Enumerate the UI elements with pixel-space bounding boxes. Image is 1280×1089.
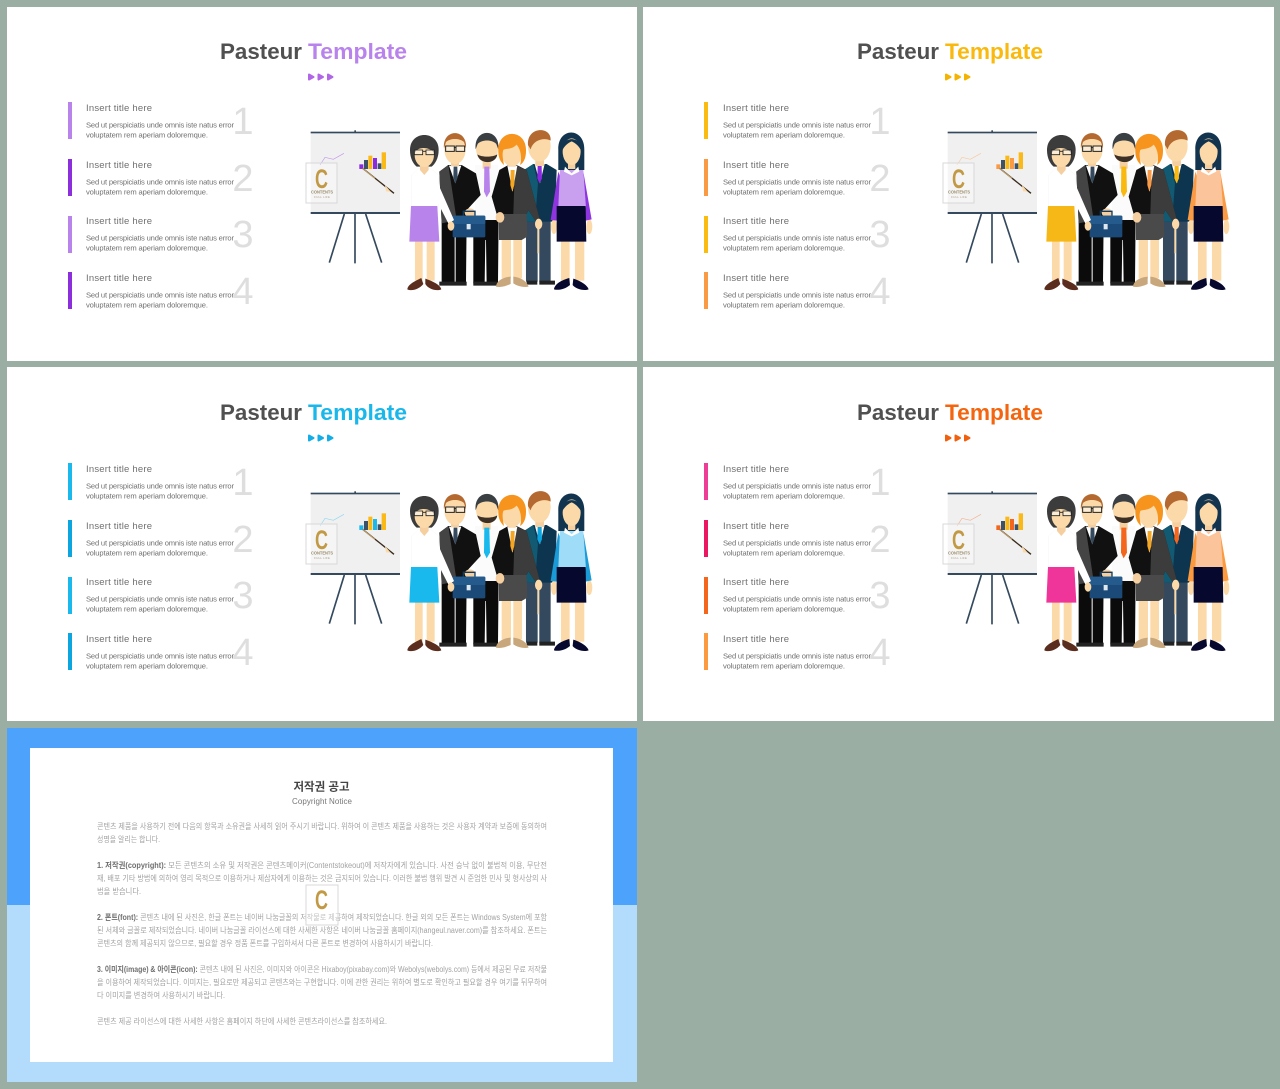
illustration: team beside presentation board: [311, 491, 592, 651]
section 3: image and icon: [97, 964, 547, 1000]
icon: three arrows: [946, 436, 970, 440]
list item 1: Sed ut perspiciatis unde omnis iste natus error: [723, 482, 871, 490]
list item 4: 4: [869, 632, 891, 674]
watermark logo: FULL LIFE: [314, 556, 330, 560]
list item 4: voluptatem rem aperiam doloremque.: [723, 300, 845, 310]
intro paragraph: 성명을 알리는 합니다.: [97, 834, 160, 844]
list item 3: voluptatem rem aperiam doloremque.: [723, 244, 845, 252]
watermark logo: [943, 524, 974, 564]
notice subtitle: Copyright Notice: [292, 797, 353, 806]
list item 2: 2: [869, 519, 891, 561]
list item 4: Insert title here: [723, 273, 789, 284]
list item 1: 1: [869, 101, 891, 143]
heading: Template: [308, 400, 407, 425]
list item 2: [68, 519, 254, 561]
list item 4: Insert title here: [86, 273, 152, 284]
list item 3: voluptatem rem aperiam doloremque.: [723, 604, 845, 614]
heading: Pasteur: [857, 39, 939, 64]
list item 2: 2: [232, 519, 254, 561]
watermark logo: CONTENTS: [948, 190, 970, 194]
watermark logo: [306, 524, 337, 564]
list item 1: 1: [232, 101, 254, 143]
panel: purple slide: [7, 7, 637, 361]
intro paragraph: [97, 821, 547, 844]
list item 1: Insert title here: [86, 464, 152, 475]
list item 3: Insert title here: [723, 577, 789, 588]
list item 2: Insert title here: [86, 160, 152, 171]
list item 1: Sed ut perspiciatis unde omnis iste natus error: [86, 120, 234, 130]
heading: [220, 39, 407, 64]
list item 4: Sed ut perspiciatis unde omnis iste natus error: [723, 652, 871, 660]
list item 1: voluptatem rem aperiam doloremque.: [723, 130, 845, 140]
list item 3: [68, 214, 254, 256]
panel: copyright notice: [7, 728, 637, 1082]
list item 3: Insert title here: [86, 577, 152, 588]
illustration: team beside presentation board: [948, 130, 1229, 290]
list item 3: 3: [869, 214, 891, 256]
list item 1: Sed ut perspiciatis unde omnis iste natus error: [86, 482, 234, 490]
list item 4: Insert title here: [723, 634, 789, 645]
list item 4: 4: [232, 271, 254, 313]
blue upper band: [7, 728, 637, 906]
list item 2: voluptatem rem aperiam doloremque.: [86, 188, 208, 196]
section 3: image and icon: 을 이용하여 제작되었습니다. 이미지는, 필요로만 제공되고 콘텐츠와는 구현합니다. 이에 관한 권리는 위하여 별도로 확인하고 필요할 경우 여기를 뒤무하여: [97, 977, 547, 987]
list item 1: voluptatem rem aperiam doloremque.: [86, 130, 208, 140]
list item 4: Insert title here: [86, 634, 152, 645]
watermark logo: [306, 885, 338, 925]
list item 2: Insert title here: [723, 160, 789, 171]
illustration: team beside presentation board: [311, 130, 592, 290]
watermark logo: [306, 163, 337, 203]
watermark logo: C: [315, 885, 328, 915]
list item 2: Sed ut perspiciatis unde omnis iste natus error: [86, 538, 234, 548]
watermark logo: CONTENTS: [311, 550, 333, 556]
section 1: copyright: 재, 배포 기타 방법에 의하여 영리 목적으로 이용하거나 제삼자에게 이용하는 것은 금지되어 있습니다. 이러한 불법 행위 발견 시 준엄한 민사 및 형사상의 사: [97, 873, 548, 883]
list item 4: [68, 271, 254, 313]
list item 1: voluptatem rem aperiam doloremque.: [86, 492, 208, 500]
section 2: font: 된 서체와 글꼴로 제작되었습니다. 네이버 나눔글꼴 라이선스에 대한 사세한 사항은 네이버 나눔글꼴 홈페이지(hangeul.naver.com)를 참조하세요. 폰트는: [97, 925, 547, 935]
list item 4: [704, 271, 891, 313]
icon: three arrows: [309, 74, 332, 80]
list item 4: Sed ut perspiciatis unde omnis iste natus error: [86, 290, 234, 300]
list item 2: voluptatem rem aperiam doloremque.: [723, 548, 845, 558]
list item 3: Insert title here: [86, 216, 152, 227]
list item 3: Sed ut perspiciatis unde omnis iste natus error: [86, 594, 234, 604]
watermark logo: FULL LIFE: [951, 556, 967, 560]
list item 4: [68, 632, 254, 674]
list item 2: Sed ut perspiciatis unde omnis iste natus error: [86, 178, 234, 186]
section 2: font: 콘텐츠의 함께 제공되지 않으므로, 필요할 경우 정품 폰트를 구입하셔서 다른 폰트로 변경하여 사용하시기 바랍니다.: [97, 938, 433, 948]
list item 2: Insert title here: [86, 521, 152, 532]
list item 4: [704, 632, 891, 674]
list item 1: Insert title here: [86, 103, 152, 114]
list item 1: Insert title here: [723, 103, 789, 114]
section 3: image and icon: 3. 이미지(image) & 아이콘(icon): 콘텐츠 내에 된 사진은, 이미지와 아이콘은 Hixaboy(pixabay.com)와 Webolys(webolys.com) 등에서 제공된 무료 저작물: [97, 964, 547, 974]
closing line: 콘텐츠 제공 라이선스에 대한 사세한 사항은 홈페이지 하단에 사세한 콘텐츠라이선스를 참조하세요.: [97, 1016, 387, 1026]
illustration: team beside presentation board: [948, 491, 1229, 651]
list item 3: Sed ut perspiciatis unde omnis iste natus error: [723, 594, 871, 604]
list item 3: 3: [232, 214, 254, 256]
icon: three arrows: [309, 436, 332, 440]
heading: Pasteur: [857, 400, 939, 425]
slide background: [643, 7, 1274, 361]
list item 4: voluptatem rem aperiam doloremque.: [86, 300, 208, 310]
list item 2: Sed ut perspiciatis unde omnis iste natus error: [723, 538, 871, 548]
list item 1: [68, 101, 254, 143]
list item 1: Sed ut perspiciatis unde omnis iste natus error: [723, 120, 871, 130]
list item 2: [68, 158, 254, 200]
list item 1: 1: [869, 462, 891, 504]
panel: yellow slide: [643, 7, 1274, 361]
list item 2: 2: [869, 158, 891, 200]
list item 1: [704, 462, 891, 504]
list item 2: [704, 158, 891, 200]
list item 3: voluptatem rem aperiam doloremque.: [86, 244, 208, 252]
list item 4: Sed ut perspiciatis unde omnis iste natus error: [86, 652, 234, 660]
heading: [220, 400, 407, 425]
watermark logo: FULL LIFE: [314, 195, 330, 199]
watermark logo: CONTENTS: [948, 550, 970, 556]
panel: orange slide: [643, 367, 1274, 721]
list item 3: Sed ut perspiciatis unde omnis iste natus error: [723, 234, 871, 242]
section 3: image and icon: 다 이미지를 변경하여 사용하시기 바랍니다.: [97, 990, 225, 1000]
list item 4: 4: [869, 271, 891, 313]
notice title: 저작권 공고: [293, 780, 350, 794]
watermark logo: CONTENTS: [311, 190, 333, 194]
intro paragraph: 콘텐츠 제품을 사용하기 전에 다음의 항목과 소유권을 사세히 읽어 주시기 바랍니다. 위하여 이 콘텐츠 제품을 사용하는 것은 사용자 계약과 보증에 동의하여: [97, 821, 547, 831]
list item 1: [68, 462, 254, 504]
list item 2: voluptatem rem aperiam doloremque.: [723, 188, 845, 196]
list item 3: [68, 575, 254, 617]
list item 1: 1: [232, 462, 254, 504]
list item 1: Insert title here: [723, 464, 789, 475]
watermark logo: C: [315, 525, 328, 555]
white card: [30, 748, 613, 1062]
slide background: [643, 367, 1274, 721]
heading: [857, 400, 1043, 425]
panel: cyan slide: [7, 367, 637, 721]
list item 3: Sed ut perspiciatis unde omnis iste natus error: [86, 234, 234, 242]
list item 3: [704, 575, 891, 617]
list item 4: Sed ut perspiciatis unde omnis iste natus error: [723, 290, 871, 300]
list item 4: 4: [232, 632, 254, 674]
light blue lower band: [7, 905, 637, 1082]
watermark logo: C: [952, 525, 965, 555]
section 1: copyright: 1. 저작권(copyright): 모든 콘텐츠의 소유 및 저작권은 콘텐츠메이커(Contentstokeout)에 저작자에게 있습니다. 사전 승낙 없이 불법적 이용, 무단전: [97, 860, 547, 870]
list item 2: Sed ut perspiciatis unde omnis iste natus error: [723, 178, 871, 186]
heading: Template: [945, 39, 1043, 64]
heading: Pasteur: [220, 400, 302, 425]
list item 3: Insert title here: [723, 216, 789, 227]
list item 2: 2: [232, 158, 254, 200]
list item 4: voluptatem rem aperiam doloremque.: [723, 662, 845, 670]
watermark logo: C: [952, 164, 965, 194]
watermark logo: FULL LIFE: [951, 195, 967, 199]
section 1: copyright: [97, 860, 548, 896]
list item 1: voluptatem rem aperiam doloremque.: [723, 492, 845, 500]
watermark logo: [943, 163, 974, 203]
list item 2: [704, 519, 891, 561]
list item 3: 3: [869, 575, 891, 617]
list item 2: voluptatem rem aperiam doloremque.: [86, 548, 208, 558]
icon: three arrows: [946, 74, 970, 80]
heading: [857, 39, 1043, 64]
heading: Template: [308, 39, 407, 64]
list item 4: voluptatem rem aperiam doloremque.: [86, 662, 208, 670]
heading: Pasteur: [220, 39, 302, 64]
heading: Template: [945, 400, 1043, 425]
list item 2: Insert title here: [723, 521, 789, 532]
list item 3: voluptatem rem aperiam doloremque.: [86, 604, 208, 614]
slide background: [7, 7, 637, 361]
watermark logo: C: [315, 164, 328, 194]
slide background: [7, 367, 637, 721]
section 2: font: 2. 폰트(font): 콘텐츠 내에 된 사진은, 한글 폰트는 네이버 나눔글꼴의 저작물로 제공하여 제작되었습니다. 한글 외의 모든 폰트는 Windows System에 포함: [97, 912, 548, 922]
list item 3: 3: [232, 575, 254, 617]
section 1: copyright: 법을 받습니다.: [97, 886, 141, 896]
list item 1: [704, 101, 891, 143]
section 2: font: [97, 912, 548, 948]
list item 3: [704, 214, 891, 256]
